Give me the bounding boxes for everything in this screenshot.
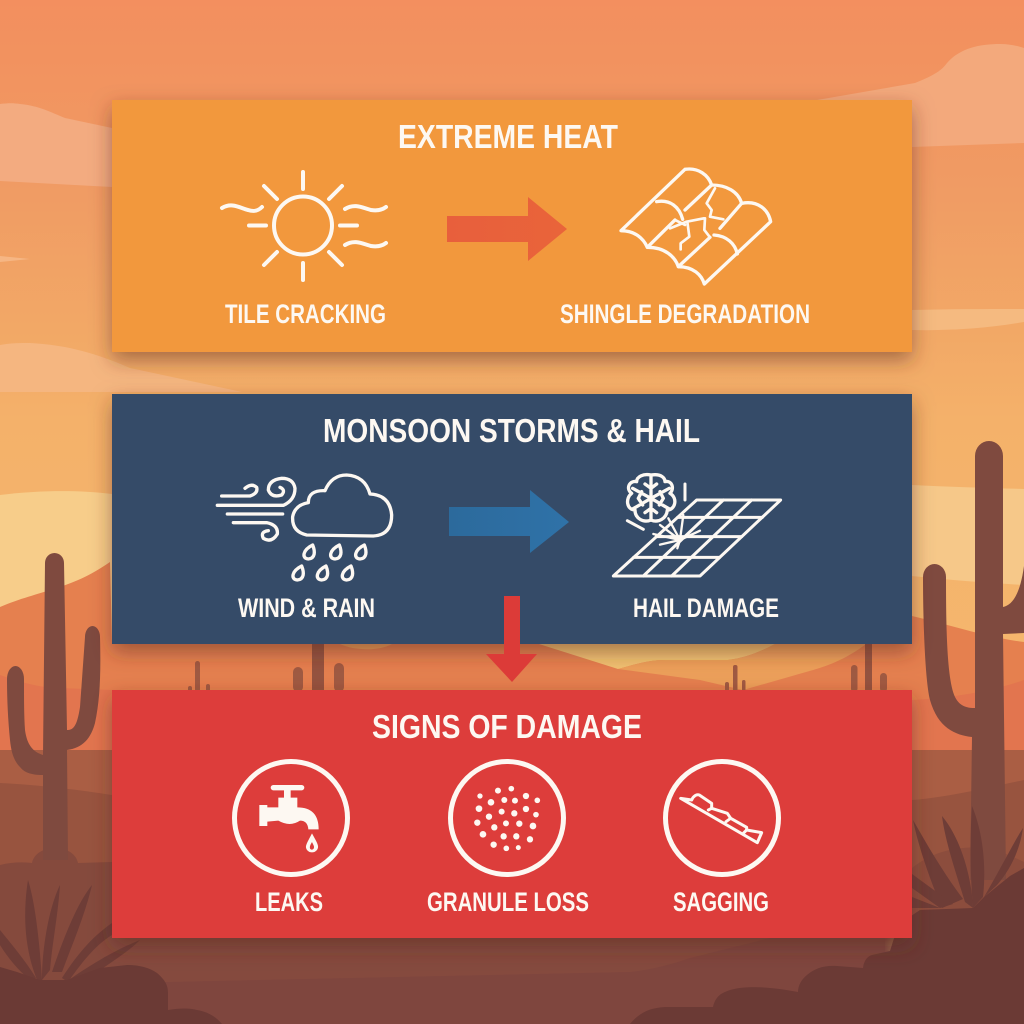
icon: hail hitting roof grid	[613, 475, 781, 576]
label: hail damage: HAIL DAMAGE	[633, 593, 779, 623]
label: leaks: LEAKS	[255, 887, 323, 917]
small distant cacti	[188, 644, 887, 692]
panel: monsoon storms and hail	[112, 394, 912, 644]
label: tile cracking: TILE CRACKING	[225, 299, 386, 329]
right foreground agave and shrubs	[630, 806, 1024, 1024]
icon: sun with heat waves	[222, 172, 386, 280]
arrow: heat to shingle	[447, 197, 567, 261]
label: shingle degradation: SHINGLE DEGRADATION	[560, 299, 810, 329]
icon: cracked shingle tiles	[621, 169, 771, 284]
icon: wind and rain cloud	[217, 475, 392, 580]
heading: monsoon storms and hail: MONSOON STORMS & HAIL	[323, 412, 700, 449]
heading: signs of damage: SIGNS OF DAMAGE	[372, 708, 642, 745]
arrow: storm to hail	[449, 490, 569, 553]
label: granule loss: GRANULE LOSS	[427, 887, 589, 917]
panel: extreme heat	[112, 100, 912, 352]
panel: signs of damage	[112, 690, 912, 938]
left saguaro cactus	[7, 553, 100, 860]
icon: granule loss dots	[450, 762, 564, 874]
arrow: storms down to signs of damage	[486, 596, 537, 682]
right saguaro cactus	[923, 441, 1024, 880]
icon: sagging roof	[666, 762, 778, 874]
label: sagging: SAGGING	[673, 887, 769, 917]
icon: leaking faucet	[234, 762, 348, 874]
label: wind and rain: WIND & RAIN	[238, 593, 375, 623]
left foreground agave and shrubs	[0, 880, 222, 1024]
heading: extreme heat: EXTREME HEAT	[398, 118, 618, 155]
